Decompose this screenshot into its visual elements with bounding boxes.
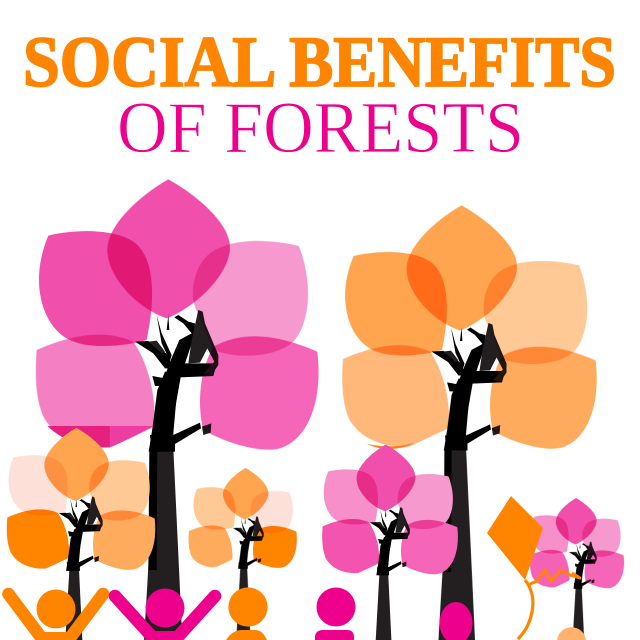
body: [226, 630, 267, 640]
body: [315, 630, 354, 640]
medium pink tree: [322, 444, 458, 640]
kite: [487, 496, 580, 639]
small orange tree, centre: [189, 468, 297, 640]
kite ribbon: [528, 570, 580, 585]
person: pink, standing: [315, 588, 356, 640]
head: [36, 590, 76, 628]
kite body: [487, 496, 543, 580]
person: orange, standing: [226, 587, 268, 640]
person: pink, arms raised: [109, 588, 221, 640]
kite tail: [518, 580, 533, 639]
small orange tree, left: [7, 428, 155, 640]
large orange tree: [342, 205, 597, 640]
large pink tree: [36, 179, 319, 640]
person: orange, arms raised: [2, 588, 109, 640]
arms and body: [2, 588, 109, 640]
head: [316, 588, 356, 626]
heading: of forests: OF FORESTS: [117, 87, 524, 168]
small pink tree, right: [530, 498, 624, 640]
head: [228, 587, 268, 627]
person: pale orange head: [557, 627, 586, 640]
person: pink head at big trunk: [440, 602, 472, 640]
head: [146, 588, 184, 628]
title: [23, 22, 616, 168]
arms and body: [109, 590, 221, 640]
